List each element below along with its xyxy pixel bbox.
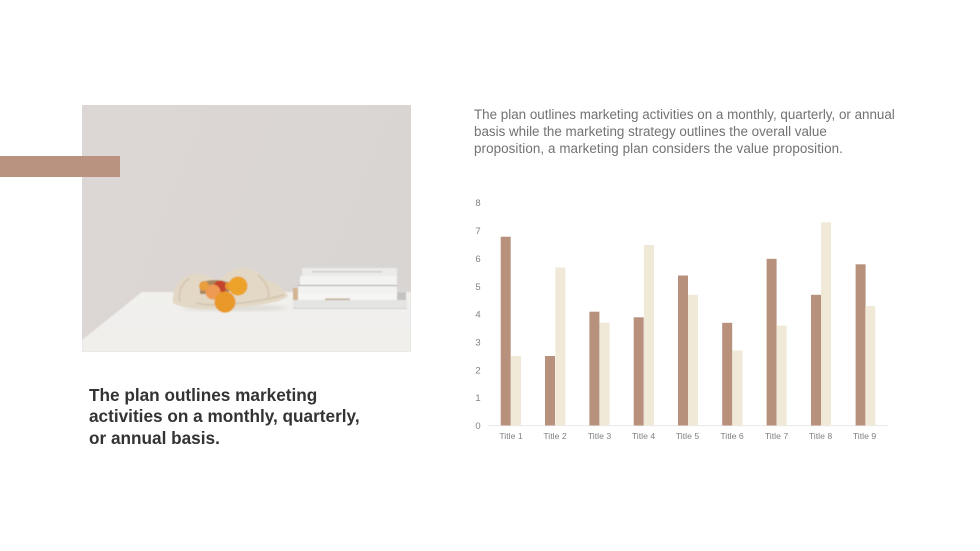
x axis labels: Title 5 <box>676 431 699 441</box>
x axis labels: Title 2 <box>543 431 567 441</box>
x axis labels: Title 3 <box>588 431 611 441</box>
series: dark bars <box>501 237 866 426</box>
heading: The plan outlines marketing <box>89 385 317 405</box>
y axis labels: 5 <box>475 282 481 293</box>
y axis labels: 3 <box>475 338 481 348</box>
bar chart <box>475 198 888 441</box>
body paragraph: proposition, a marketing plan considers the value proposition. <box>474 141 843 156</box>
y axis labels: 4 <box>475 310 481 320</box>
y axis labels: 6 <box>475 254 481 265</box>
body paragraph: basis while the marketing strategy outlines the overall value <box>474 124 827 139</box>
y axis labels <box>475 198 481 432</box>
heading <box>89 385 360 448</box>
body paragraph: The plan outlines marketing activities on a monthly, quarterly, or annual <box>474 106 895 122</box>
books <box>293 268 407 309</box>
y axis labels: 0 <box>475 421 481 432</box>
y axis labels: 7 <box>475 226 481 237</box>
y axis labels: 2 <box>475 366 481 376</box>
y axis labels: 8 <box>475 198 481 209</box>
heading: activities on a monthly, quarterly, <box>89 406 360 426</box>
x axis labels: Title 7 <box>765 431 788 441</box>
body paragraph <box>474 106 895 156</box>
x axis labels: Title 9 <box>853 431 876 441</box>
x axis labels: Title 8 <box>809 431 832 441</box>
x axis labels: Title 4 <box>632 431 655 441</box>
x axis labels: Title 1 <box>499 431 523 441</box>
x axis labels <box>499 431 876 441</box>
heading: or annual basis. <box>89 428 220 448</box>
x axis labels: Title 6 <box>720 431 744 441</box>
fruit bag <box>173 268 288 312</box>
series: light bars <box>511 222 875 426</box>
y axis labels: 1 <box>475 393 481 404</box>
accent bar <box>0 156 120 177</box>
photo: fruit bag and books on a white table <box>82 105 411 352</box>
